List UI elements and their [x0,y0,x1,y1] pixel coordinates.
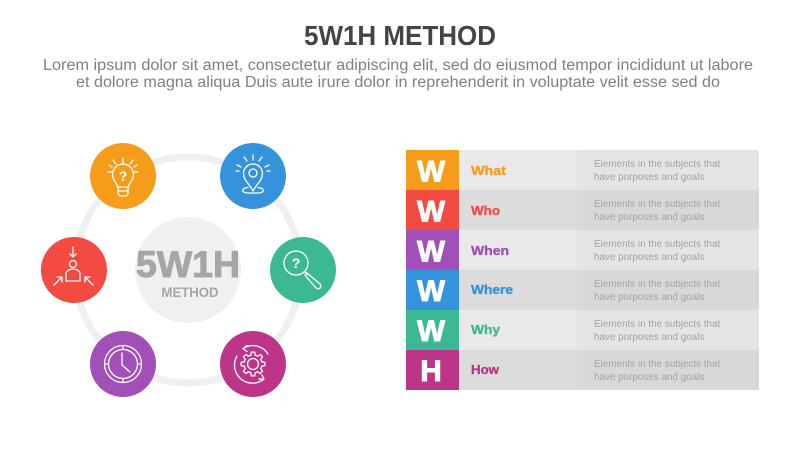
row: How: have purposes and goals [594,372,704,383]
row: When [406,230,759,270]
icon: light bulb question: ? [119,168,127,184]
row: What: What [471,164,507,178]
row: What: W [417,156,445,188]
icon: magnifier question: ? [292,255,300,271]
icon: gear with cycle arrows [220,331,286,397]
row: How: H [420,355,442,388]
panel: table [406,150,759,390]
icon: magnifier question [270,237,336,303]
center badge [135,217,241,323]
icon: clock [90,331,156,397]
row: Who [406,190,759,230]
row: Why [406,310,759,350]
icon: light bulb question [90,143,156,209]
row: When: When [471,244,509,258]
row: What: Elements in the subjects that [594,159,721,170]
subtitle text: et dolore magna aliqua Duis aute irure dolor in reprehenderit in voluptate velit esse sed do [76,74,720,91]
row: What [406,150,759,190]
ring [75,157,301,383]
row: When: W [417,236,445,268]
icon: location pin [220,143,286,209]
row: Where: Where [471,283,513,297]
row: Why: Elements in the subjects that [594,319,721,330]
row: Where [406,270,759,310]
title: 5W1H METHOD [304,20,496,51]
icon: person with arrows [41,237,107,303]
center badge: 5W1H [136,244,240,285]
row: Who: have purposes and goals [594,212,704,223]
row: How: Elements in the subjects that [594,359,721,370]
row: How [406,350,759,390]
row: Who: Who [471,204,500,218]
subtitle text: Lorem ipsum dolor sit amet, consectetur adipiscing elit, sed do eiusmod tempor incididunt ut labore [43,57,753,74]
row: Where: Elements in the subjects that [594,279,721,290]
row: When: Elements in the subjects that [594,239,721,250]
row: Where: have purposes and goals [594,292,704,303]
row: Who: Elements in the subjects that [594,199,721,210]
subtitle text [43,57,753,91]
row: Why: have purposes and goals [594,332,704,343]
row: Who: W [417,196,445,228]
row: Why: W [417,315,445,348]
row: What: have purposes and goals [594,172,704,183]
center badge: METHOD [162,284,218,300]
panel: circular diagram [41,143,336,397]
row: How: How [471,363,499,377]
row: Why: Why [471,323,500,337]
row: Where: W [417,275,445,308]
row: When: have purposes and goals [594,252,704,263]
